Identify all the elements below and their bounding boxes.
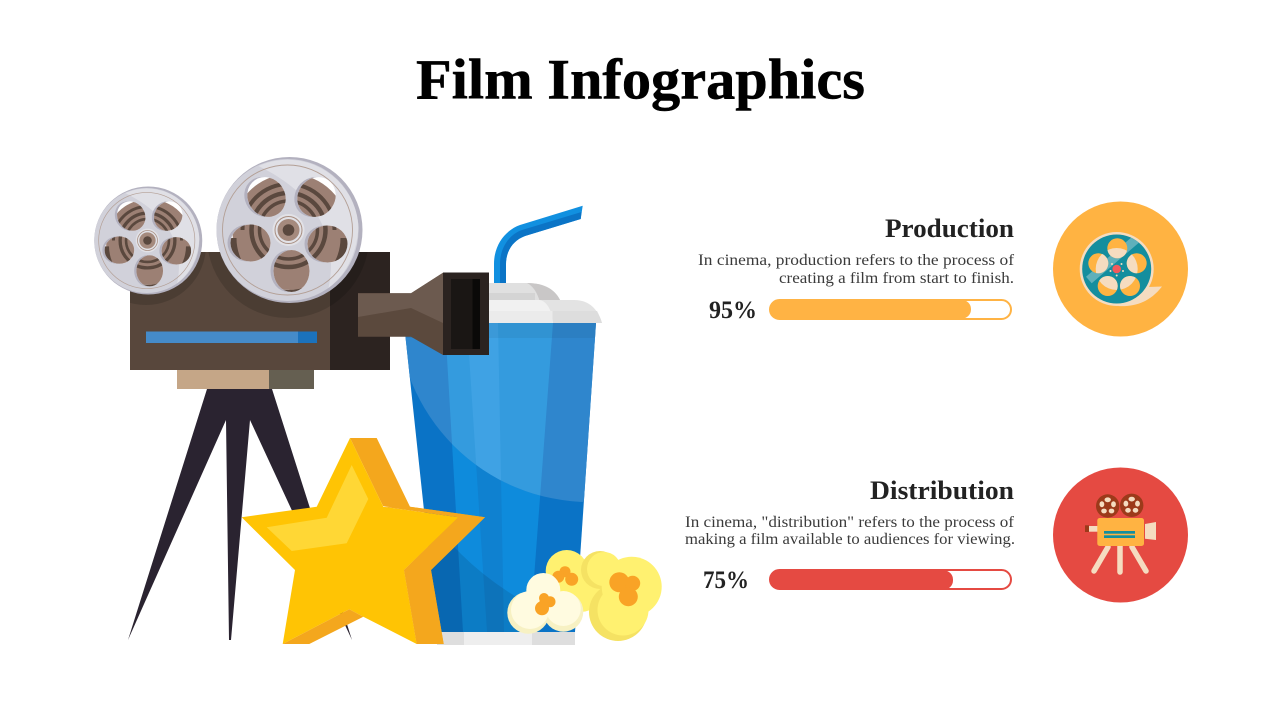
camera side panel [330, 252, 390, 370]
panel: production [698, 202, 1188, 336]
blue strip [146, 332, 317, 343]
projector camera [86, 156, 489, 389]
icon: film reel [1053, 202, 1188, 336]
distribution heading: Distribution [870, 476, 1015, 505]
cup base [437, 632, 575, 645]
distribution description: making a film available to audiences for viewing. [685, 531, 1015, 548]
star [242, 438, 485, 644]
distribution progress bar [770, 570, 1011, 590]
popcorn piece: white [507, 573, 583, 634]
drink cup [400, 206, 602, 650]
production progress bar [770, 300, 1011, 319]
large film reel [216, 157, 362, 303]
camera body [130, 252, 330, 370]
small film reel [93, 186, 202, 295]
cup body [405, 323, 596, 632]
distribution description [685, 514, 1015, 548]
production description: In cinema, production refers to the process of [698, 252, 1015, 269]
production description [698, 252, 1015, 287]
distribution description: In cinema, "distribution" refers to the process of [685, 514, 1015, 531]
upper lid [485, 283, 561, 302]
reel shadows [130, 252, 330, 318]
production description: creating a film from start to finish. [779, 270, 1014, 287]
popcorn piece: right [581, 551, 662, 641]
title: Film Infographics [416, 48, 865, 112]
production heading: Production [885, 214, 1015, 243]
projector lens [358, 272, 489, 355]
production percentage: 95% [709, 297, 757, 324]
panel: distribution [685, 468, 1188, 602]
lower lid [480, 300, 602, 323]
distribution percentage: 75% [703, 567, 749, 594]
illustration: film projector, drink and popcorn [86, 156, 662, 650]
icon: movie camera [1053, 468, 1188, 602]
camera base [177, 370, 314, 389]
tripod legs [128, 389, 352, 640]
straw [494, 206, 583, 286]
popcorn piece: middle [546, 550, 602, 612]
popcorn [507, 550, 662, 641]
